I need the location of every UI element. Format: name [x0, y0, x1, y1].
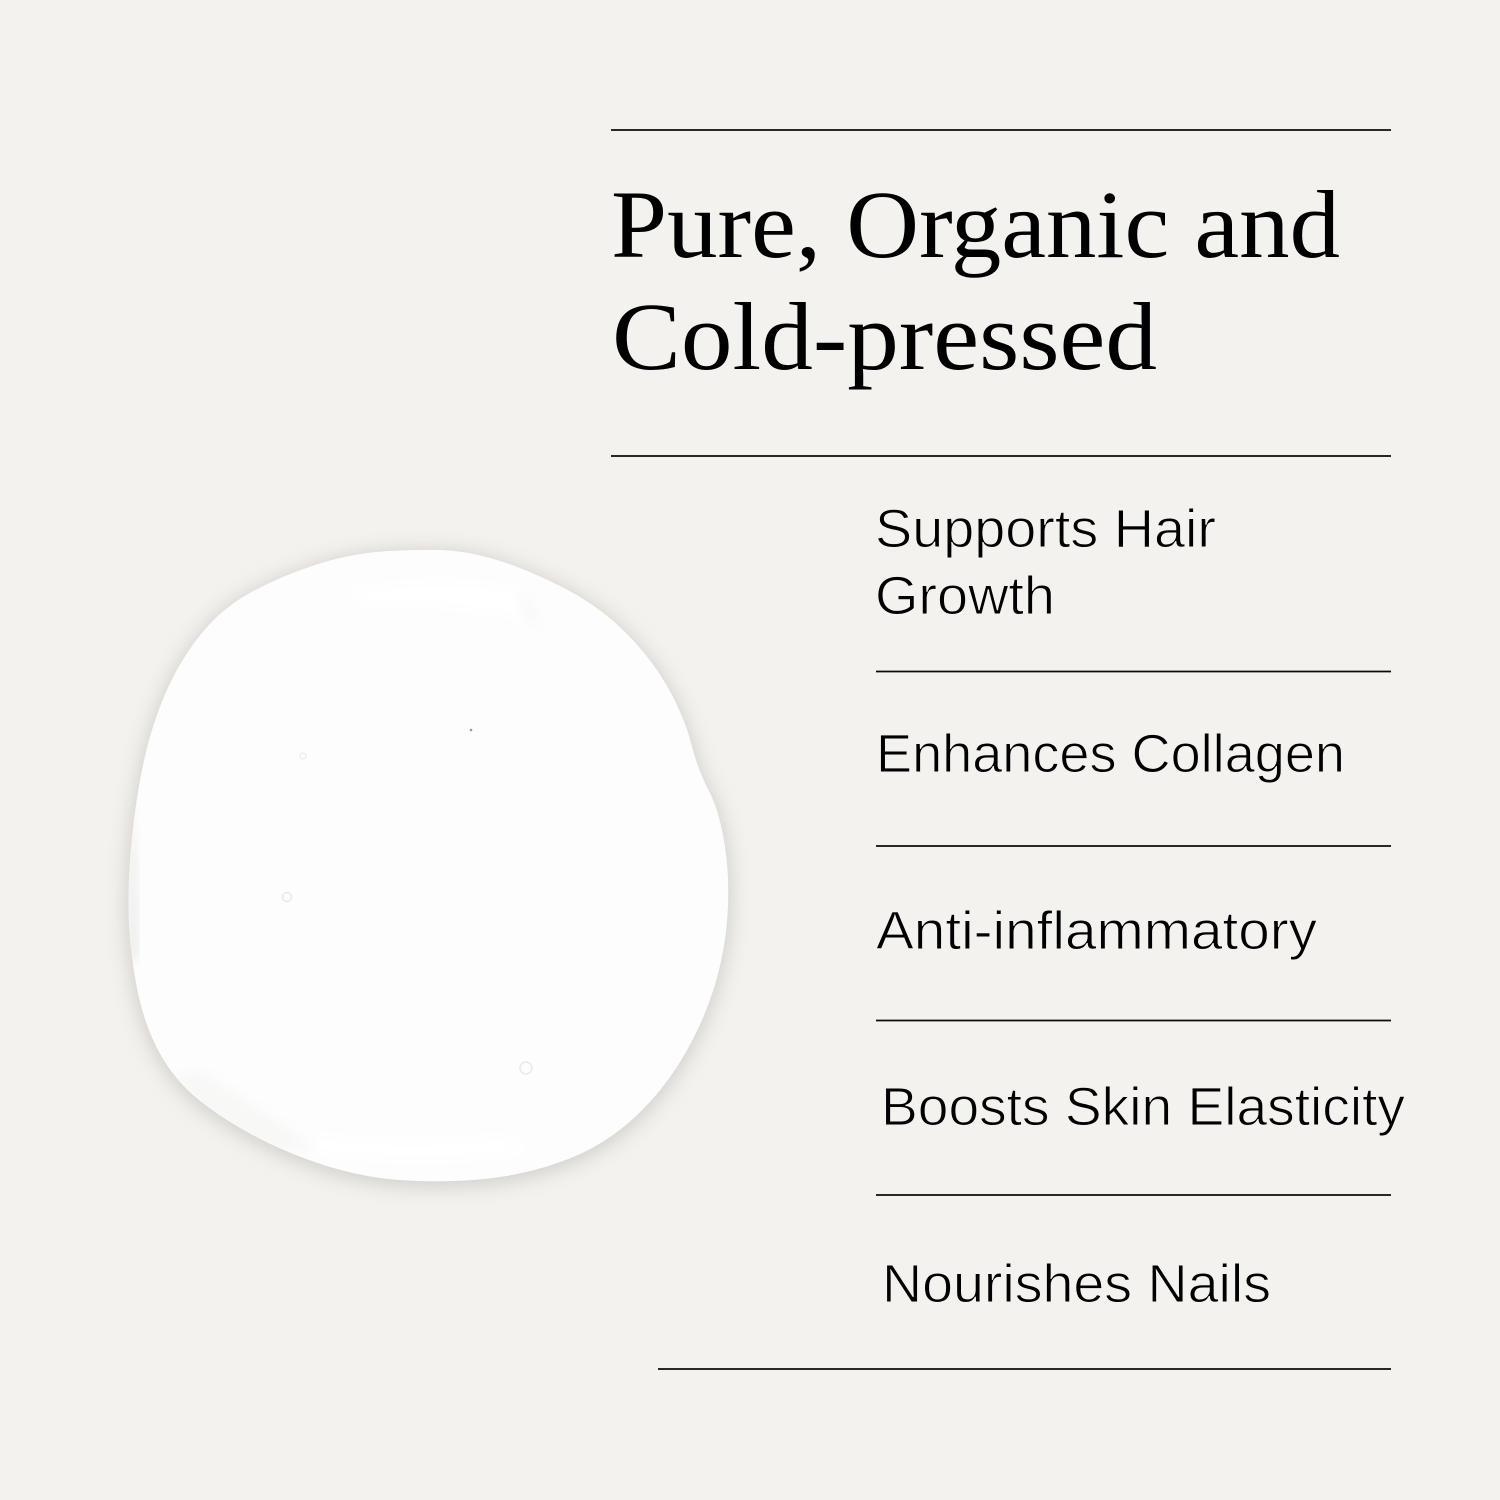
benefit divider 4	[876, 1194, 1391, 1196]
benefit: supports hair growth: Supports Hair	[875, 499, 1216, 559]
title: Pure, Organic and	[611, 171, 1340, 278]
benefit: nourishes nails: Nourishes Nails	[882, 1254, 1271, 1314]
title: Cold-pressed	[612, 283, 1157, 390]
benefit divider 3	[876, 1020, 1391, 1022]
top rule	[611, 129, 1391, 131]
bottom rule	[658, 1368, 1391, 1370]
infographic canvas	[118, 129, 1404, 1370]
benefit: boosts skin elasticity: Boosts Skin Elasticity	[881, 1077, 1405, 1137]
benefit divider 1	[876, 670, 1391, 672]
benefit: enhances collagen: Enhances Collagen	[876, 724, 1345, 784]
benefit: anti-inflammatory: Anti-inflammatory	[876, 901, 1317, 961]
title bottom rule	[611, 455, 1391, 457]
benefit: supports hair growth: Growth	[875, 566, 1055, 626]
title	[611, 171, 1340, 390]
benefit divider 2	[876, 845, 1391, 847]
benefit: supports hair growth	[875, 499, 1216, 626]
serum droplet blob	[128, 550, 728, 1184]
